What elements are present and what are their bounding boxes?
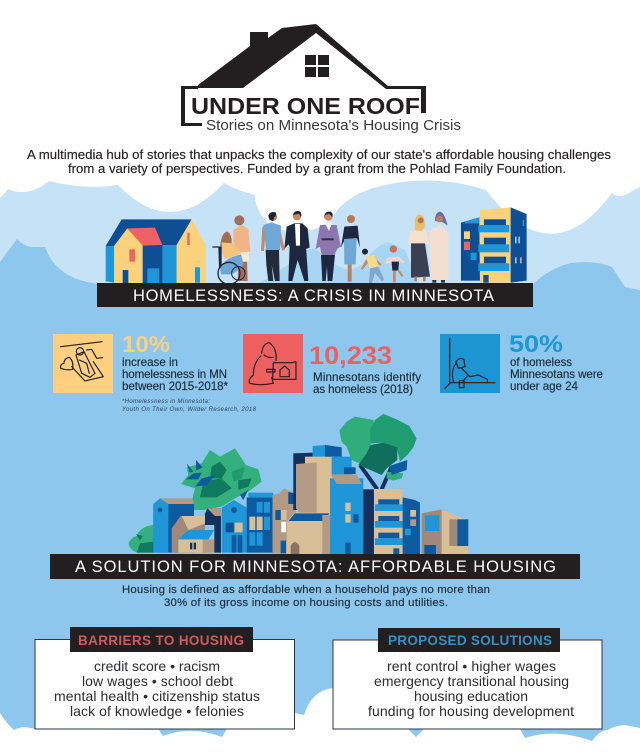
stat description: of homeless: [510, 356, 572, 369]
source footnote: [122, 399, 257, 413]
stat: 50%: [440, 331, 603, 393]
big number: 10,233: [309, 342, 392, 370]
illustration: adults: [212, 211, 360, 284]
stat description: Minnesotans were: [510, 368, 603, 381]
people: two children: [361, 245, 405, 283]
stat description: homelessness in MN: [122, 368, 227, 381]
source footnote: *Homelessness in Minnesota:: [122, 399, 210, 405]
banner: affordable housing: [50, 554, 580, 579]
solutions list: housing education: [414, 688, 528, 704]
illustration: children and couple: [361, 212, 448, 283]
people: wheelchair user and carer: [212, 215, 250, 284]
intro text: A multimedia hub of stories that unpacks the complexity of our state's affordable housing challenges: [27, 148, 611, 162]
solutions list: emergency transitional housing: [374, 673, 569, 689]
barriers list: [54, 658, 260, 719]
panel: proposed solutions: [333, 628, 602, 729]
stat description: under age 24: [510, 380, 579, 393]
barriers list: lack of knowledge • felonies: [70, 703, 244, 719]
intro text: [27, 148, 611, 176]
banner: homelessness: HOMELESSNESS: A CRISIS IN MINNESOTA: [133, 287, 494, 305]
icon: leafy tree: [181, 448, 262, 510]
banner: affordable housing: A SOLUTION FOR MINNESOTA: AFFORDABLE HOUSING: [75, 558, 556, 576]
stat description: Minnesotans identify: [313, 371, 421, 384]
icon: house roof: [181, 24, 426, 126]
stat description: [122, 356, 228, 393]
stat description: [510, 356, 603, 393]
people: woman in hijab: [408, 214, 430, 281]
barriers list: low wages • school debt: [82, 673, 233, 689]
barriers list: credit score • racism: [94, 658, 220, 674]
logo: Under One Roof: [181, 24, 461, 134]
source footnote: Youth On Their Own, Wilder Research, 2018: [122, 407, 257, 413]
stat description: between 2015-2018*: [122, 380, 228, 393]
stat description: increase in: [122, 356, 178, 369]
panel heading: BARRIERS TO HOUSING: [78, 633, 244, 648]
buildings: [153, 445, 468, 557]
definition text: [122, 584, 490, 609]
stat description: [313, 371, 421, 396]
people: two women holding hands: [316, 212, 360, 282]
subtitle: Stories on Minnesota's Housing Crisis: [206, 118, 461, 134]
panel heading: PROPOSED SOLUTIONS: [388, 633, 552, 648]
people: man in robe: [429, 212, 448, 283]
big number: 50%: [509, 331, 563, 358]
icon: big tree: [339, 414, 417, 489]
definition text: Housing is defined as affordable when a household pays no more than: [122, 584, 490, 596]
panel heading: [378, 628, 560, 652]
stat description: as homeless (2018): [313, 383, 413, 396]
stat: 10,233: [243, 334, 421, 396]
solutions list: [368, 658, 574, 719]
intro text: from a variety of perspectives. Funded by a grant from the Pohlad Family Foundation.: [68, 162, 566, 176]
big number: 10%: [122, 331, 170, 357]
definition text: 30% of its gross income on housing costs and utilities.: [164, 597, 448, 609]
barriers list: mental health • citizenship status: [54, 688, 260, 704]
title: UNDER ONE ROOF: [191, 93, 420, 119]
panel heading: [70, 627, 253, 652]
panel: barriers to housing: [35, 627, 294, 729]
icon: house: [106, 219, 206, 284]
banner: homelessness: [97, 283, 533, 307]
icon: bush: [128, 525, 153, 553]
people: two men holding hands: [261, 211, 310, 281]
icon: apartment building: [461, 207, 527, 283]
icon: person sleeping on bench: [53, 334, 113, 393]
stat: 10%: [53, 331, 257, 413]
solutions list: rent control • higher wages: [387, 658, 556, 674]
illustration: affordable housing neighbourhood: [128, 414, 468, 557]
solutions list: funding for housing development: [368, 703, 574, 719]
sky and clouds background: [0, 180, 640, 752]
icon: person slumped against wall: [440, 334, 500, 393]
icon: hooded person holding house sign: [243, 334, 303, 393]
